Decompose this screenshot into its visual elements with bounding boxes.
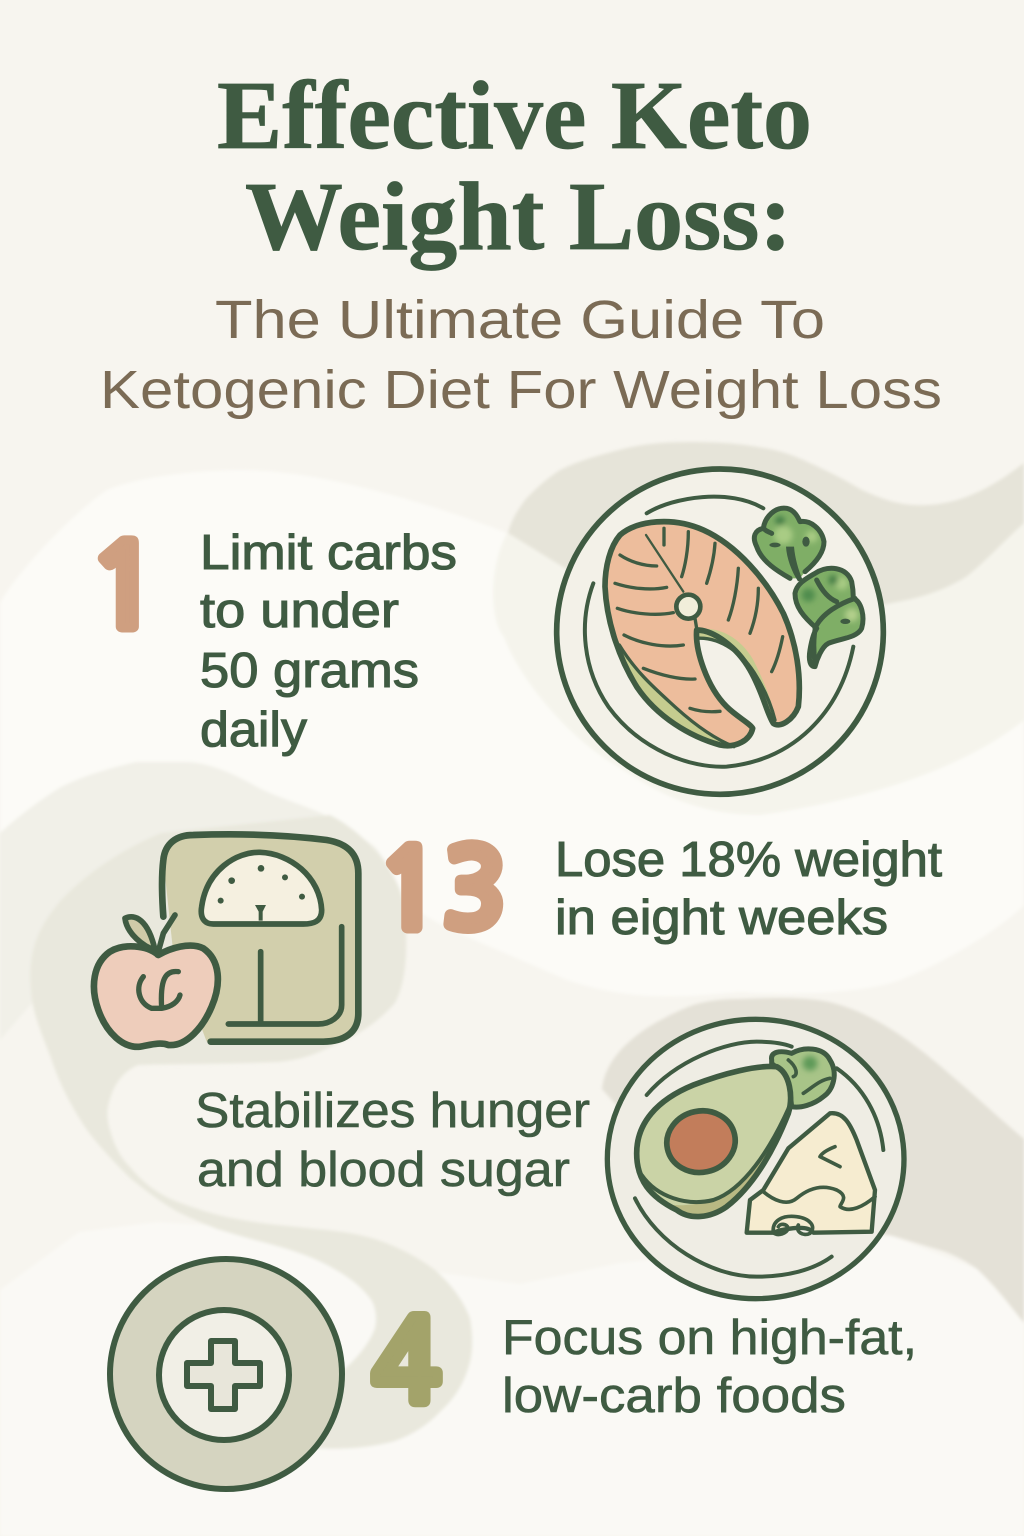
icon: salmon plate — [557, 469, 883, 794]
title — [217, 62, 812, 270]
text: lose weight: Lose 18% weight — [555, 833, 942, 887]
icon: scale and apple — [94, 834, 358, 1047]
text: limit carbs: 50 grams — [200, 644, 419, 698]
title: Weight Loss: — [245, 163, 792, 270]
subtitle: Ketogenic Diet For Weight Loss — [100, 360, 942, 420]
text: focus on high-fat — [502, 1311, 917, 1423]
icon: avocado and cheese plate — [607, 1019, 904, 1299]
icon: medical plus badge — [110, 1259, 342, 1489]
text: stabilizes hunger: and blood sugar — [197, 1143, 570, 1197]
text: limit carbs: Limit carbs — [200, 526, 457, 580]
number 4: 4 — [372, 1307, 441, 1419]
text: limit carbs: to under — [200, 584, 399, 638]
text: focus on high-fat: low-carb foods — [502, 1369, 846, 1423]
text: limit carbs: daily — [200, 703, 308, 757]
subtitle — [100, 290, 942, 420]
title: Effective Keto — [217, 62, 812, 169]
text: lose weight — [555, 833, 942, 945]
number 13: 13 — [377, 837, 507, 945]
number 1: 1 — [86, 530, 162, 646]
text: focus on high-fat: Focus on high-fat, — [502, 1311, 917, 1365]
text: limit carbs — [200, 526, 457, 757]
text: lose weight: in eight weeks — [555, 891, 888, 945]
text: stabilizes hunger: Stabilizes hunger — [195, 1084, 590, 1138]
text: stabilizes hunger — [195, 1084, 590, 1197]
subtitle: The Ultimate Guide To — [215, 290, 825, 350]
